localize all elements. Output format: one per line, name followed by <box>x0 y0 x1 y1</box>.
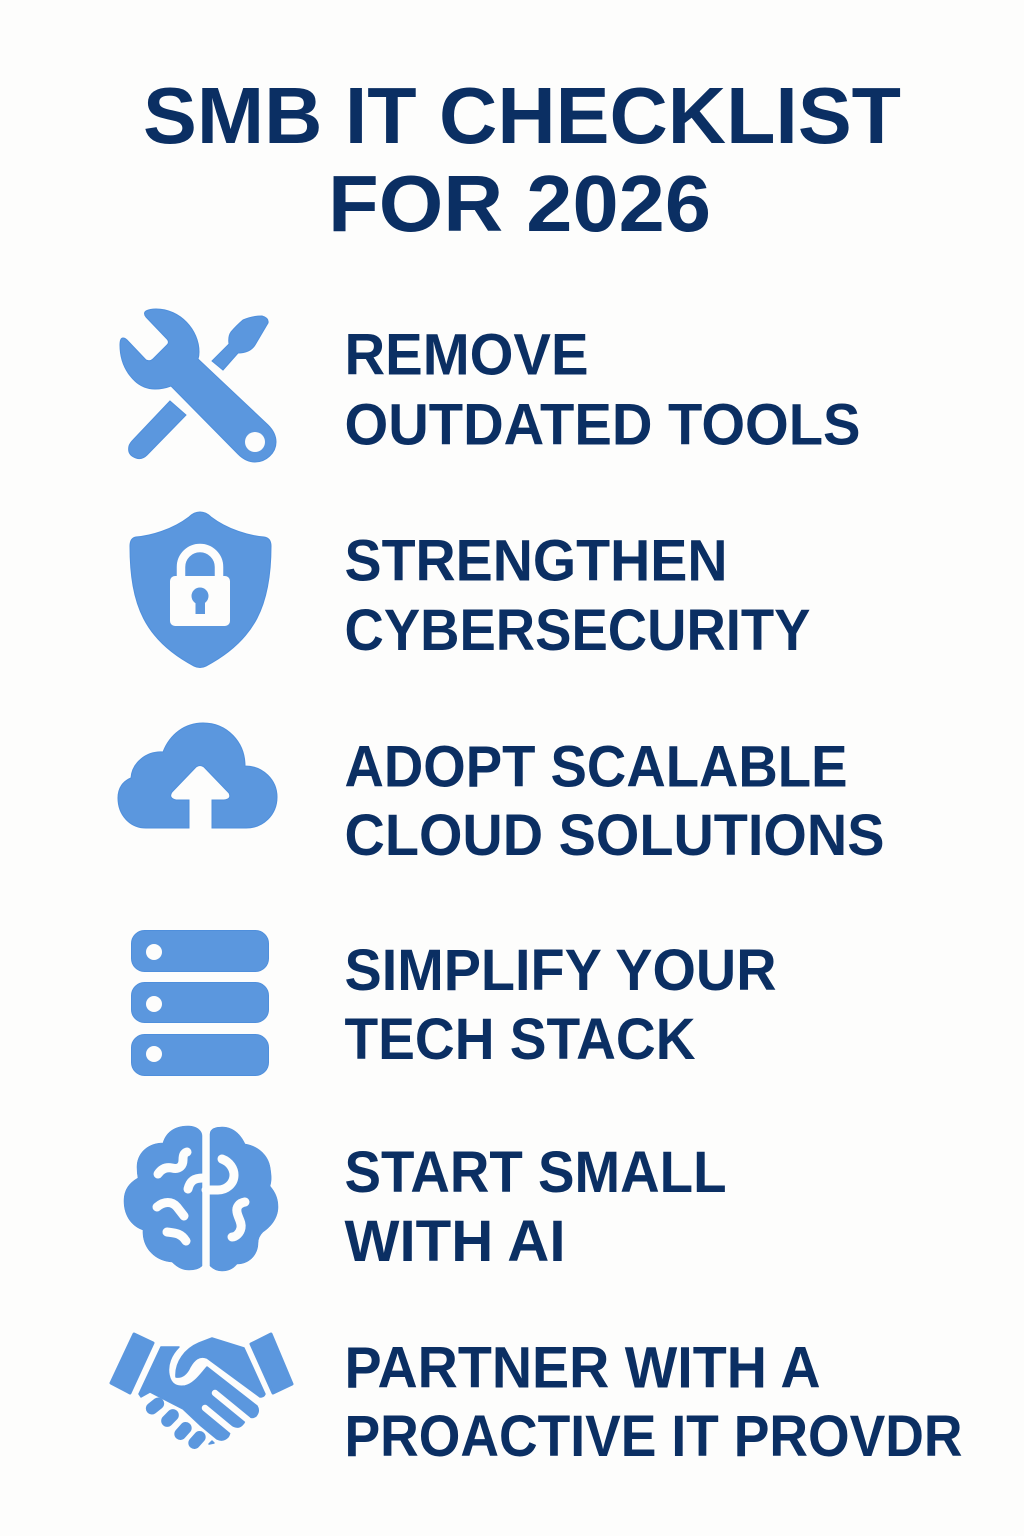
icon: server stack <box>132 930 268 1076</box>
text: simplify your tech stack: SIMPLIFY YOUR <box>344 938 776 1003</box>
title: FOR 2026 <box>328 159 711 248</box>
text: start small with ai <box>344 1140 726 1274</box>
text: strengthen cybersecurity: STRENGTHEN <box>344 528 728 594</box>
text: start small with ai: START SMALL <box>344 1140 726 1205</box>
text: strengthen cybersecurity <box>344 528 810 663</box>
icon: brain <box>124 1126 278 1271</box>
icon: handshake <box>111 1334 292 1451</box>
text: strengthen cybersecurity: CYBERSECURITY <box>344 598 810 663</box>
text: start small with ai: WITH AI <box>344 1209 566 1274</box>
text: simplify your tech stack <box>344 938 776 1072</box>
title: SMB IT CHECKLIST <box>143 71 901 160</box>
text: remove outdated tools: REMOVE <box>344 322 588 388</box>
text: adopt scalable cloud solutions <box>344 734 884 868</box>
text: partner with a proactive it provdr: PARTNER WITH A <box>344 1336 820 1400</box>
text: remove outdated tools <box>344 322 860 458</box>
text: simplify your tech stack: TECH STACK <box>344 1007 696 1072</box>
text: partner with a proactive it provdr: PROACTIVE IT PROVDR <box>344 1404 962 1469</box>
text: adopt scalable cloud solutions: CLOUD SOLUTIONS <box>344 803 884 868</box>
icon: cloud upload <box>118 723 277 828</box>
text: partner with a proactive it provdr <box>344 1336 962 1469</box>
text: adopt scalable cloud solutions: ADOPT SCALABLE <box>344 734 848 800</box>
text: remove outdated tools: OUTDATED TOOLS <box>344 392 860 458</box>
icon: wrench and brush <box>120 309 276 462</box>
icon: shield with padlock <box>130 512 271 668</box>
title <box>143 71 901 248</box>
